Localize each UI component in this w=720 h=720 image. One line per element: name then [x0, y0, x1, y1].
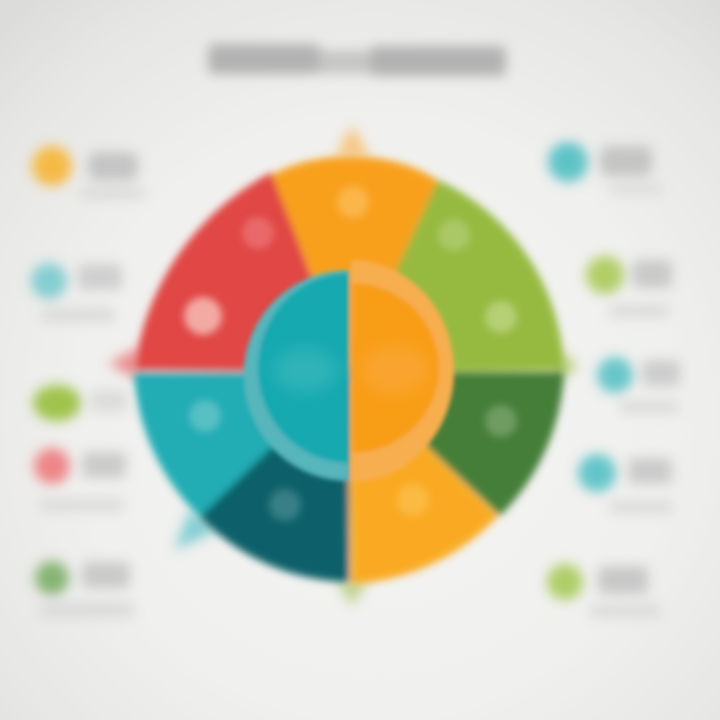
- inner ring and centre: [244, 260, 454, 482]
- icon: dark teal: [269, 489, 301, 521]
- title: [208, 44, 506, 76]
- icon: green lower: [485, 301, 517, 333]
- segment: light green: [349, 180, 564, 372]
- legend: left: [31, 146, 144, 618]
- legend item: green: [547, 564, 660, 618]
- pointer tips: [108, 126, 578, 606]
- icon: red upper: [242, 217, 274, 249]
- legend item: teal: [31, 263, 122, 322]
- icon: green upper: [438, 219, 470, 251]
- legend item: yellow: [32, 146, 144, 198]
- segment: amber bottom: [349, 372, 498, 584]
- centre half: orange: [352, 283, 439, 453]
- legend item: teal: [548, 142, 662, 194]
- inner ring: orange: [351, 260, 454, 482]
- icon: red lower: [184, 297, 222, 335]
- centre highlights: [273, 346, 429, 394]
- panel: circular diagram: [108, 126, 578, 606]
- legend item: green: [33, 385, 128, 421]
- segment: orange top: [272, 156, 440, 372]
- segment: red: [135, 172, 349, 372]
- centre half: teal: [258, 273, 349, 463]
- icon: orange top: [337, 186, 369, 218]
- segment: teal left: [134, 372, 349, 517]
- legend item: teal: [578, 454, 672, 514]
- inner ring: teal: [244, 270, 349, 481]
- segment: dark green: [349, 372, 564, 516]
- icon: dark green: [485, 405, 517, 437]
- legend: right: [547, 142, 680, 618]
- segment icons: [184, 186, 517, 521]
- legend item: dark green: [35, 561, 134, 618]
- legend item: teal: [597, 357, 680, 414]
- legend item: red: [34, 448, 126, 512]
- icon: teal: [189, 400, 221, 432]
- icon: amber: [397, 484, 429, 516]
- wheel segments: [134, 156, 564, 584]
- legend item: green: [586, 256, 672, 318]
- segment: dark teal: [198, 372, 349, 582]
